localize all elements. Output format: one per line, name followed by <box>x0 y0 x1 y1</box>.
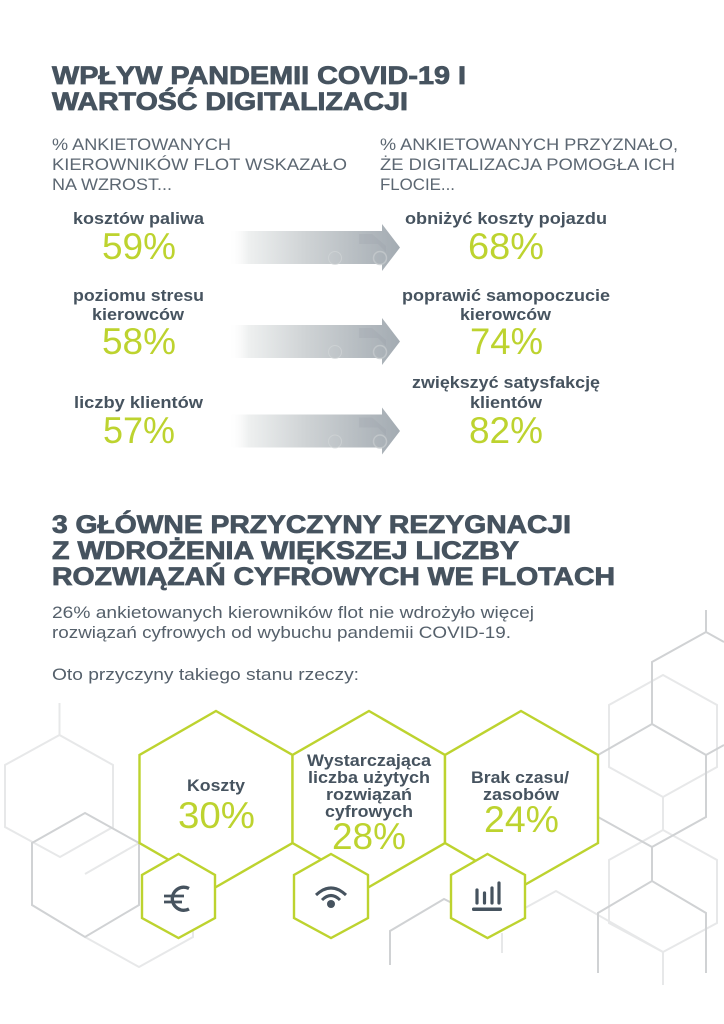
panel: costs hexagon: 30% <box>178 795 255 836</box>
right column intro text: % ANKIETOWANYCH PRZYZNAŁO, <box>380 136 678 154</box>
left column intro text: KIEROWNIKÓW FLOT WSKAZAŁO <box>52 155 347 174</box>
stat: client satisfaction 82%: 82% <box>469 410 543 451</box>
left column intro text: % ANKIETOWANYCH <box>52 136 231 154</box>
stat: driver wellbeing 74%: kierowców <box>460 305 552 324</box>
stat: client satisfaction 82% <box>412 373 600 451</box>
stat: driver stress 58%: poziomu stresu <box>73 286 204 305</box>
right column intro text <box>380 136 678 194</box>
left column intro text: NA WZROST... <box>52 176 172 194</box>
stat: number of clients 57% <box>74 393 204 451</box>
title: section 2: Z WDROŻENIA WIĘKSZEJ LICZBY <box>52 537 519 565</box>
title: section 2 <box>52 509 615 591</box>
stat: driver stress 58% <box>73 286 204 362</box>
stat: driver wellbeing 74%: 74% <box>470 321 543 362</box>
icon: euro <box>142 854 215 938</box>
body text: rozwiązań cyfrowych od wybuchu pandemii COVID-19. <box>52 624 511 642</box>
stat: vehicle costs 68%: 68% <box>468 226 544 267</box>
panel: lack of time hexagon: zasobów <box>483 785 560 804</box>
panel: costs hexagon <box>140 711 292 887</box>
icon: bar chart <box>451 854 525 938</box>
body text <box>52 604 534 684</box>
background hexagon pattern <box>5 610 724 985</box>
stat: driver stress 58%: kierowców <box>92 305 185 324</box>
panel: enough digital solutions hexagon: 28% <box>332 816 406 857</box>
arrow 2 <box>228 318 400 365</box>
panel: enough digital solutions hexagon: cyfrowych <box>325 802 413 821</box>
stat: fuel costs 59%: kosztów paliwa <box>73 209 205 228</box>
stat: vehicle costs 68% <box>405 209 607 267</box>
body text: 26% ankietowanych kierowników flot nie wdrożyło więcej <box>52 604 534 622</box>
panel: enough digital solutions hexagon: liczba użytych <box>308 768 430 787</box>
panel: enough digital solutions hexagon: rozwiązań <box>326 785 412 804</box>
stat: number of clients 57%: 57% <box>103 410 175 451</box>
panel: enough digital solutions hexagon <box>292 711 445 887</box>
panel: lack of time hexagon: 24% <box>484 799 559 840</box>
title: section 2: 3 GŁÓWNE PRZYCZYNY REZYGNACJI <box>52 509 571 539</box>
stat: vehicle costs 68%: obniżyć koszty pojazdu <box>405 209 607 228</box>
left column intro text <box>52 136 347 194</box>
title: section 2: ROZWIĄZAŃ CYFROWYCH WE FLOTACH <box>52 562 615 591</box>
arrow 1 <box>228 224 400 271</box>
panel: lack of time hexagon <box>445 711 598 887</box>
stat: driver wellbeing 74% <box>402 286 610 362</box>
title: section 1: WARTOŚĆ DIGITALIZACJI <box>52 86 408 116</box>
icon: wifi <box>294 854 368 938</box>
panel: lack of time hexagon: Brak czasu/ <box>471 768 569 787</box>
body text: Oto przyczyny takiego stanu rzeczy: <box>52 666 359 684</box>
title: section 1 <box>52 62 466 116</box>
arrow 3 <box>228 408 400 454</box>
stat: fuel costs 59% <box>73 209 205 267</box>
panel: enough digital solutions hexagon: Wystarczająca <box>307 751 432 770</box>
stat: driver wellbeing 74%: poprawić samopoczucie <box>402 286 610 305</box>
right column intro text: FLOCIE... <box>380 176 455 194</box>
panel: costs hexagon: Koszty <box>187 776 246 795</box>
stat: fuel costs 59%: 59% <box>102 226 176 267</box>
stat: number of clients 57%: liczby klientów <box>74 393 204 412</box>
stat: client satisfaction 82%: zwiększyć satysfakcję <box>412 373 600 392</box>
title: section 1: WPŁYW PANDEMII COVID-19 I <box>52 62 466 90</box>
stat: driver stress 58%: 58% <box>102 321 176 362</box>
right column intro text: ŻE DIGITALIZACJA POMOGŁA ICH <box>380 155 675 174</box>
stat: client satisfaction 82%: klientów <box>470 393 543 412</box>
